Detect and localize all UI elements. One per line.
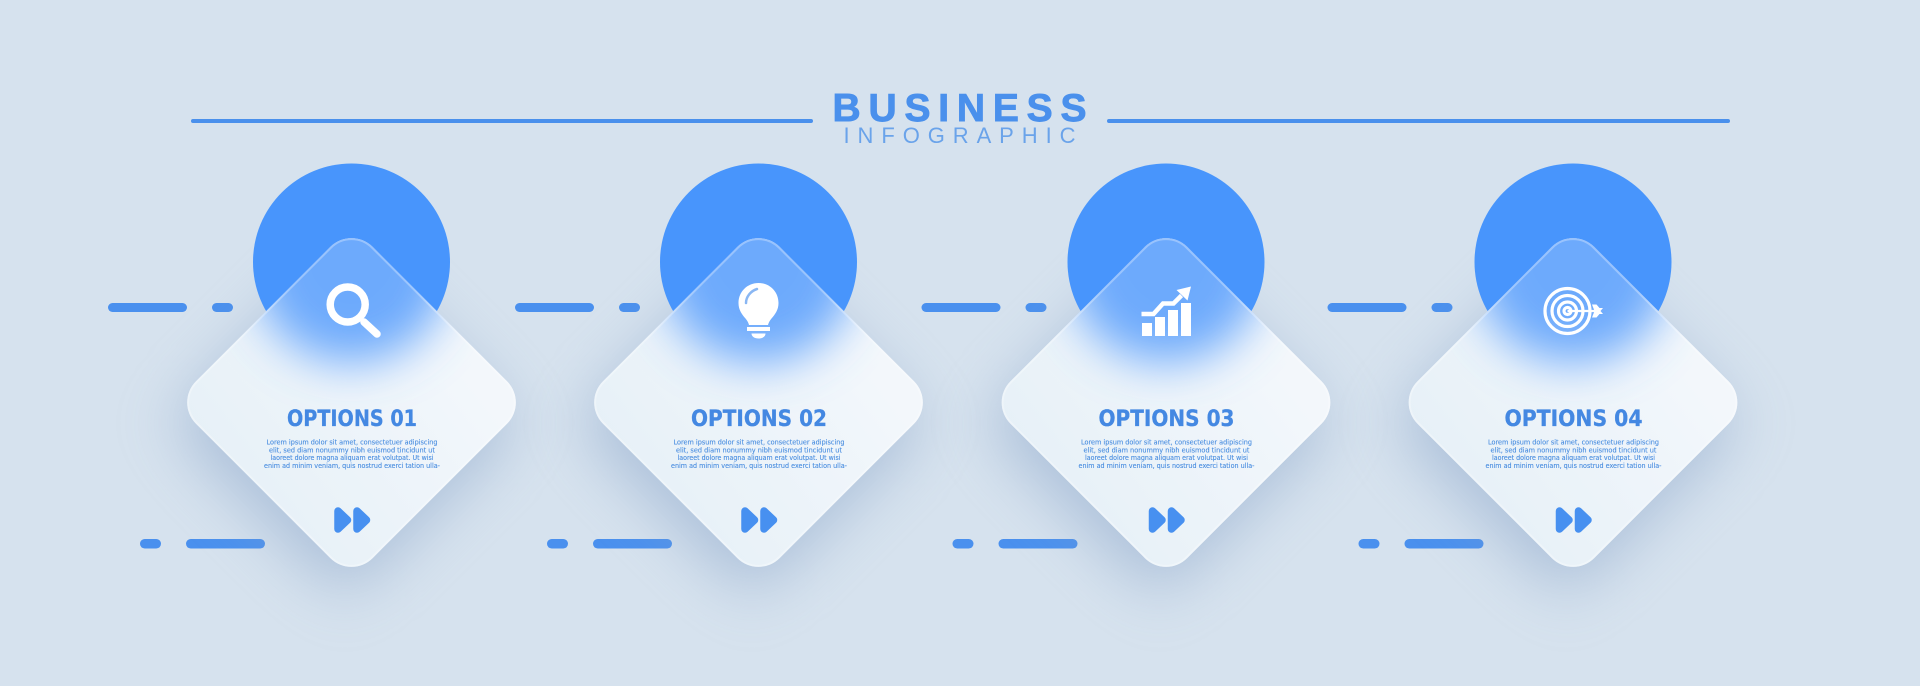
panel: option 04 (1328, 164, 1772, 600)
connector dashes 04 (1328, 303, 1484, 548)
title: INFOGRAPHIC (844, 123, 1076, 148)
title: BUSINESS (832, 87, 1086, 130)
body text 03: enim ad minim veniam, quis nostrud exerci tation ulla- (1078, 462, 1255, 470)
body text 03: elit, sed diam nonummy nibh euismod tincidunt ut (1084, 446, 1250, 454)
body text 04: Lorem ipsum dolor sit amet, consectetuer adipiscing (1488, 438, 1659, 446)
icon: forward arrows 01 (338, 511, 366, 529)
connector dashes 02 (515, 303, 672, 548)
body text 01: enim ad minim veniam, quis nostrud exerci tation ulla- (264, 462, 441, 470)
heading 02: OPTIONS 02 (691, 407, 827, 432)
card 04 (1372, 164, 1772, 600)
panel: option 03 (922, 164, 1364, 600)
heading 03: OPTIONS 03 (1098, 407, 1234, 432)
body text 02 (671, 438, 848, 470)
heading 01: OPTIONS 01 (287, 407, 417, 432)
connector dashes 03 (922, 303, 1078, 548)
body text 01: elit, sed diam nonummy nibh euismod tincidunt ut (269, 446, 435, 454)
card 03 (964, 164, 1364, 600)
body text 04: elit, sed diam nonummy nibh euismod tincidunt ut (1490, 446, 1657, 454)
body text 03: Lorem ipsum dolor sit amet, consectetuer adipiscing (1081, 438, 1252, 446)
body text 04 (1486, 438, 1662, 470)
icon: target (1545, 288, 1603, 334)
body text 01: Lorem ipsum dolor sit amet, consectetuer adipiscing (266, 438, 438, 446)
panel: option 02 (515, 164, 957, 600)
heading 04: OPTIONS 04 (1504, 407, 1642, 432)
body text 02: laoreet dolore magna aliquam erat volutpat. Ut wisi (678, 454, 841, 462)
icon: magnifier (330, 287, 377, 334)
body text 01 (264, 438, 441, 470)
body text 03 (1078, 438, 1255, 470)
body text 03: laoreet dolore magna aliquam erat volutpat. Ut wisi (1085, 454, 1248, 462)
connector dashes 01 (108, 303, 265, 548)
body text 02: elit, sed diam nonummy nibh euismod tincidunt ut (676, 446, 842, 454)
panel: option 01 (108, 164, 550, 600)
card 02 (557, 164, 957, 600)
card 01 (150, 164, 550, 600)
icon: growth chart (1142, 286, 1191, 336)
icon: forward arrows 02 (745, 511, 774, 529)
body text 04: enim ad minim veniam, quis nostrud exerci tation ulla- (1486, 462, 1662, 470)
body text 04: laoreet dolore magna aliquam erat volutpat. Ut wisi (1492, 454, 1655, 462)
icon: light bulb (738, 283, 778, 338)
body text 01: laoreet dolore magna aliquam erat volutpat. Ut wisi (270, 454, 434, 462)
icon: forward arrows 04 (1560, 511, 1588, 529)
title (191, 87, 1730, 148)
body text 02: enim ad minim veniam, quis nostrud exerci tation ulla- (671, 462, 848, 470)
icon: forward arrows 03 (1152, 511, 1181, 529)
body text 02: Lorem ipsum dolor sit amet, consectetuer adipiscing (674, 438, 844, 446)
